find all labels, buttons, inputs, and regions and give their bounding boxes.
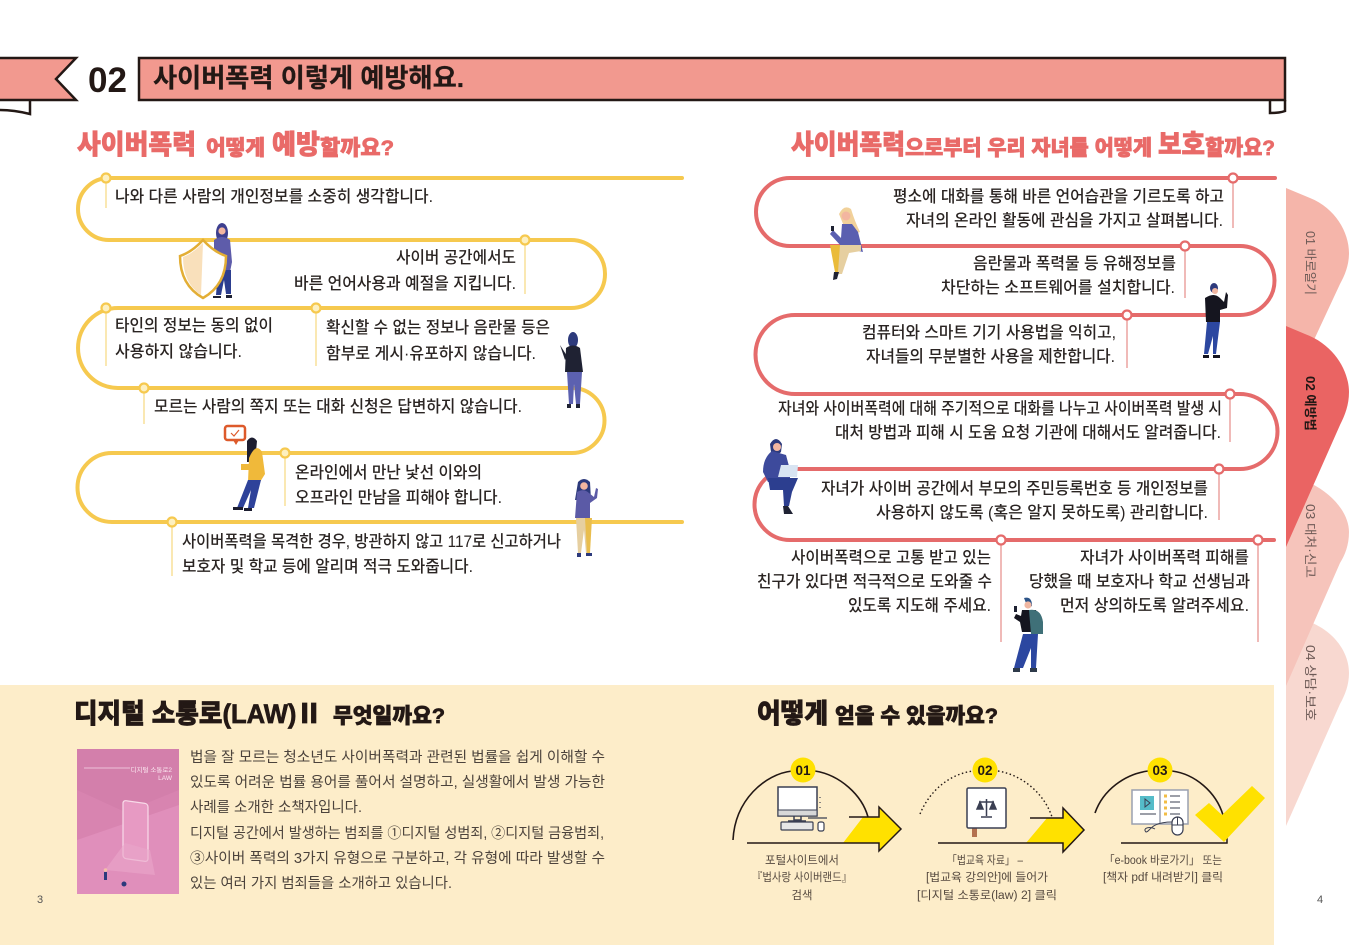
advice 7 [1029, 548, 1250, 615]
advice 5 [821, 479, 1208, 522]
tab 01: 01 바로알기 [1303, 231, 1317, 295]
heading: what is it: 디지털 소통로(LAW)Ⅱ [74, 699, 322, 729]
step 1 arrow [747, 807, 901, 851]
advice 3: 컴퓨터와 스마트 기기 사용법을 익히고, [862, 323, 1116, 342]
advice 3: 자녀들의 무분별한 사용을 제한합니다. [866, 347, 1115, 366]
booklet cover: LAW [158, 775, 173, 782]
step 1 arc [733, 771, 868, 840]
rule 1: 나와 다른 사람의 개인정보를 소중히 생각합니다. [115, 187, 433, 206]
guide description: 있도록 어려운 법률 용어를 풀어서 설명하고, 실생활에서 발생 가능한 [190, 774, 605, 791]
rule 3: 타인의 정보는 동의 없이 [115, 316, 273, 335]
heading: how to get it: 어떻게 [757, 699, 828, 729]
title bar: 사이버폭력 이렇게 예방해요. [153, 63, 464, 93]
advice 1: 자녀의 온라인 활동에 관심을 가지고 살펴봅니다. [906, 211, 1223, 230]
rule 2: 바른 언어사용과 예절을 지킵니다. [294, 274, 516, 293]
icon: woman in dark jacket [560, 332, 583, 408]
panel: protection timeline [754, 174, 1278, 672]
tab 04 [1286, 612, 1349, 826]
red winding path [754, 178, 1278, 540]
rule 5: 모르는 사람의 쪽지 또는 대화 신청은 답변하지 않습니다. [154, 397, 522, 416]
node stems [1001, 178, 1258, 642]
advice 1: 평소에 대화를 통해 바른 언어습관을 기르도록 하고 [893, 187, 1224, 206]
step 1 [733, 758, 901, 902]
step 3 caption: [책자 pdf 내려받기] 클릭 [1103, 870, 1223, 884]
panel: digital guide [0, 685, 1274, 945]
step 3 badge: 03 [1152, 763, 1168, 778]
rule 6: 온라인에서 만난 낯선 이와의 [295, 463, 482, 482]
advice 3 [862, 323, 1116, 366]
heading: protection [791, 130, 1275, 160]
advice 2: 음란물과 폭력물 등 유해정보를 [973, 254, 1176, 273]
guide description: 디지털 공간에서 발생하는 범죄를 ①디지털 성범죄, ②디지털 금융범죄, [190, 825, 604, 842]
rule 7 [182, 532, 561, 576]
step 3 caption: 「e-book 바로가기」 또는 [1104, 854, 1222, 867]
tab 02 active [1286, 326, 1349, 547]
heading: protection: 할까요? [1205, 137, 1275, 160]
guide description: 있는 여러 가지 범죄들을 소개하고 있습니다. [190, 875, 452, 892]
step 2 caption: [법교육 강의안]에 들어가 [926, 871, 1048, 884]
heading: how to get it [757, 699, 998, 729]
icon: computer [778, 787, 827, 831]
tab 02 active: 02 예방법 [1303, 376, 1317, 431]
heading: protection: 으로부터 우리 자녀를 어떻게 [905, 137, 1152, 160]
step 2 arrow [938, 808, 1084, 852]
icon: blond woman sitting [830, 207, 863, 280]
rule 4 [326, 318, 550, 363]
heading: prevention [77, 130, 394, 160]
rule 2 [294, 248, 516, 293]
page number right: 4 [1317, 894, 1323, 906]
icon: woman in purple top [575, 479, 598, 557]
icon: woman with phone and speech bubble [225, 426, 265, 511]
left ribbon [0, 58, 76, 114]
step 2 badge [972, 758, 998, 782]
advice 7: 먼저 상의하도록 알려주세요. [1060, 596, 1249, 615]
panel: prevention timeline [78, 174, 682, 576]
step 1 caption: 검색 [792, 889, 812, 902]
tab 03: 03 대처·신고 [1303, 504, 1317, 578]
guide description [190, 749, 605, 892]
heading: protection: 보호 [1158, 130, 1205, 160]
step 2 badge: 02 [977, 763, 993, 778]
step 1 badge [790, 758, 816, 782]
step 2 arc [920, 771, 1052, 817]
step 2 [917, 758, 1084, 902]
panel background [0, 685, 1274, 945]
heading: protection: 사이버폭력 [791, 130, 905, 160]
advice 6 [757, 548, 992, 615]
step 2 caption: [디지털 소통로(law) 2] 클릭 [917, 888, 1057, 902]
advice 4 [778, 399, 1222, 442]
step 3 baseline [1121, 838, 1227, 843]
step 1 caption: 『법사랑 사이버랜드』 [752, 871, 852, 884]
heading: prevention: 어떻게 [206, 137, 265, 160]
rule 7: 보호자 및 학교 등에 알리며 적극 도와줍니다. [182, 557, 473, 576]
tab 01 [1286, 188, 1349, 400]
step 3 badge [1148, 758, 1172, 782]
rule 4: 함부로 게시·유포하지 않습니다. [326, 344, 536, 363]
rule 4: 확신할 수 없는 정보나 음란물 등은 [326, 318, 550, 337]
step 3 caption [1103, 854, 1223, 884]
rule 3: 사용하지 않습니다. [115, 342, 242, 361]
advice 6: 사이버폭력으로 고통 받고 있는 [791, 548, 991, 567]
tab 04: 04 상담·보호 [1303, 645, 1317, 721]
step 1 caption [752, 853, 852, 902]
advice 7: 당했을 때 보호자나 학교 선생님과 [1029, 572, 1250, 591]
rule 6: 오프라인 만남을 피해야 합니다. [295, 488, 502, 507]
node markers [996, 174, 1262, 544]
advice 1 [893, 187, 1224, 230]
icon: e-book and mouse [1132, 790, 1188, 835]
advice 5: 사용하지 않도록 (혹은 알지 못하도록) 관리합니다. [876, 503, 1208, 522]
page number left: 3 [37, 894, 43, 906]
rule 7: 사이버폭력을 목격한 경우, 방관하지 않고 117로 신고하거나 [182, 532, 561, 551]
icon: law book [967, 788, 1006, 837]
rule 6 [295, 463, 502, 507]
icon: check mark [1195, 786, 1265, 842]
step 1 badge: 01 [795, 763, 811, 778]
advice 7: 자녀가 사이버폭력 피해를 [1080, 548, 1249, 567]
heading: prevention: 할까요? [320, 137, 394, 160]
advice 4: 대처 방법과 피해 시 도움 요청 기관에 대해서도 알려줍니다. [835, 423, 1221, 442]
step 2 caption: 「법교육 자료」 – [947, 854, 1024, 867]
step 1 caption: 포털사이트에서 [765, 853, 839, 867]
advice 6: 친구가 있다면 적극적으로 도와줄 수 [757, 572, 992, 591]
advice 2: 차단하는 소프트웨어를 설치합니다. [941, 278, 1175, 297]
section number: 02 [88, 61, 127, 100]
advice 4: 자녀와 사이버폭력에 대해 주기적으로 대화를 나누고 사이버폭력 발생 시 [778, 399, 1222, 418]
heading: what is it: 무엇일까요? [333, 705, 445, 728]
guide description: 법을 잘 모르는 청소년도 사이버폭력과 관련된 법률을 쉽게 이해할 수 [190, 749, 605, 766]
step 3 arc [1095, 771, 1223, 815]
heading: how to get it: 얻을 수 있을까요? [835, 705, 998, 728]
node markers [102, 174, 530, 526]
icon: man in black sweater [1203, 283, 1228, 358]
heading: prevention: 사이버폭력 [77, 130, 196, 160]
node stems [106, 178, 525, 576]
tab 03 [1286, 470, 1349, 686]
icon: man with backpack [1013, 598, 1043, 672]
yellow winding path [78, 178, 682, 522]
advice 6: 있도록 지도해 주세요. [848, 596, 991, 615]
guide description: 사례를 소개한 소책자입니다. [190, 799, 362, 816]
rule 2: 사이버 공간에서도 [396, 248, 516, 267]
header banner [0, 58, 1285, 114]
booklet cover [77, 749, 179, 894]
advice 2 [941, 254, 1176, 297]
step 2 caption [917, 854, 1057, 902]
title bar [139, 58, 1285, 113]
rule 3 [115, 316, 273, 361]
icon: woman with shield [180, 223, 232, 298]
icon: woman with laptop [763, 439, 798, 514]
advice 5: 자녀가 사이버 공간에서 부모의 주민등록번호 등 개인정보를 [821, 479, 1208, 498]
side navigation tabs [1286, 188, 1349, 826]
heading: prevention: 예방 [272, 130, 320, 160]
guide description: ③사이버 폭력의 3가지 유형으로 구분하고, 각 유형에 따라 발생할 수 [190, 850, 605, 867]
booklet cover: 디지털 소통로2 [131, 765, 172, 774]
step 3 [1095, 758, 1265, 884]
